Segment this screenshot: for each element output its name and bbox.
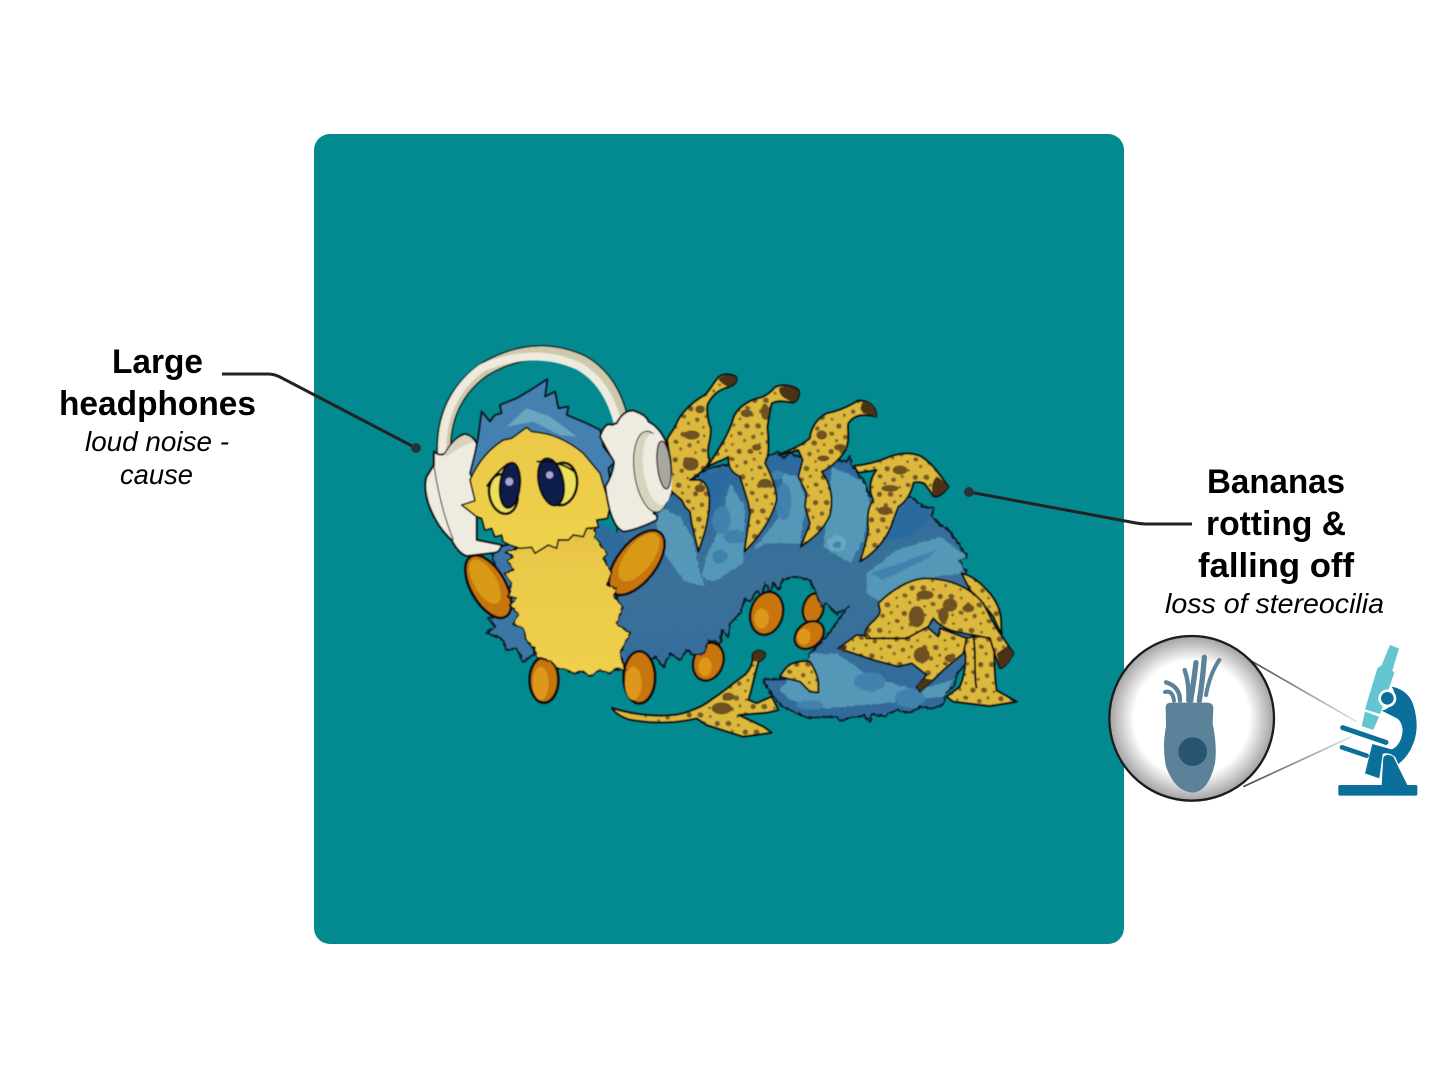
microscope pillar	[1382, 755, 1407, 785]
cluster blotches	[909, 590, 974, 663]
fur stripes	[657, 467, 967, 710]
yellow head	[462, 427, 610, 553]
banana 4	[854, 454, 948, 562]
subtext: loss of stereocilia: loss of stereocilia	[1165, 588, 1384, 619]
heading: large headphones	[59, 343, 256, 423]
left eye	[485, 462, 522, 516]
blue fur body	[617, 452, 983, 722]
heading: large headphones: Large	[112, 343, 203, 381]
leader line: bananas	[969, 492, 1192, 524]
banana 3	[778, 401, 876, 547]
hair highlight	[507, 408, 577, 437]
heading: large headphones: headphones	[59, 385, 256, 423]
heading: bananas rotting: Bananas	[1207, 463, 1345, 501]
tail banana cluster	[838, 578, 1017, 706]
heading: bananas rotting: rotting &	[1206, 505, 1346, 543]
blue hair	[470, 379, 615, 507]
icon: microscope	[1338, 645, 1417, 796]
background panel	[314, 134, 1124, 944]
yellow chest	[505, 527, 630, 676]
subtext: loud noise cause: loud noise -	[85, 426, 229, 457]
banana 1	[667, 374, 737, 552]
leader dot: bananas	[964, 487, 974, 497]
front feet	[530, 651, 655, 703]
lens circle with hair cell	[1109, 636, 1274, 801]
left back fur	[487, 520, 633, 662]
heading: bananas rotting: falling off	[1198, 547, 1355, 585]
subtext: loud noise cause: cause	[120, 459, 193, 490]
subtext: loud noise cause	[85, 426, 229, 490]
fallen banana peel	[612, 651, 778, 737]
right ear cup	[600, 411, 676, 532]
front arms	[456, 521, 675, 625]
rear feet	[688, 588, 829, 685]
stereocilia	[1165, 657, 1219, 701]
caterpillar head and front	[425, 353, 676, 703]
banana 2	[707, 385, 799, 552]
caterpillar rear body with bananas	[612, 374, 1017, 737]
microscope arm	[1365, 687, 1417, 778]
cell nucleus	[1178, 737, 1207, 766]
hair cell body	[1164, 703, 1216, 793]
illustration: caterpillar with headphones	[425, 353, 1017, 737]
back tail banana	[962, 573, 1002, 635]
microscope base	[1338, 785, 1417, 796]
left ear cup	[425, 434, 502, 556]
microscope stage	[1342, 728, 1386, 756]
microscope knob	[1378, 689, 1396, 707]
callout: large headphones	[59, 343, 421, 490]
callout: bananas	[964, 463, 1384, 619]
magnification beams	[1243, 658, 1357, 787]
right eye	[534, 456, 580, 508]
small tail peel	[780, 661, 818, 693]
leader dot: headphones	[411, 443, 421, 453]
headphone band	[442, 353, 621, 455]
microscope tube	[1365, 645, 1399, 714]
leader line: headphones	[222, 374, 416, 448]
heading: bananas rotting	[1198, 463, 1355, 585]
microscope magnification	[1109, 636, 1417, 801]
